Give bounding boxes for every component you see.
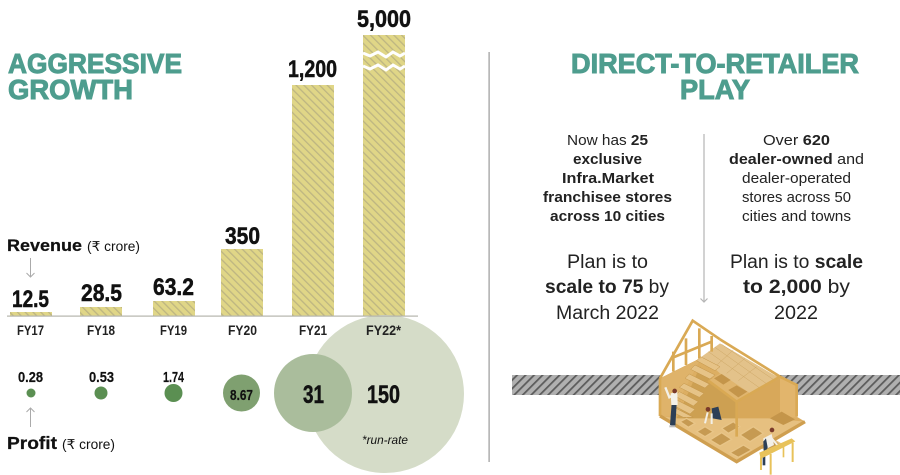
- label: revenue: (₹ crore): [87, 239, 140, 254]
- text: franchisee stores: across 10 cities: [550, 209, 665, 225]
- illustration: wooden house under construction: [660, 321, 805, 475]
- center divider: [488, 52, 490, 462]
- arrow: profit up: [26, 408, 34, 427]
- text: plan to scale to 75: Plan is to: [567, 252, 648, 273]
- text: plan to scale to 2,000: to 2,000 by: [743, 277, 851, 298]
- table: [759, 438, 795, 475]
- text: plan to scale to 75: [545, 252, 669, 324]
- profit bubbles: 0.53: [89, 369, 114, 386]
- fiscal year labels: FY19: [160, 322, 187, 338]
- text: plan to scale to 75: scale to 75 by: [545, 277, 669, 298]
- fiscal year labels: FY22*: [366, 322, 401, 338]
- bar chart: revenue: 12.5: [12, 286, 49, 313]
- panel: direct-to-retailer play: [512, 48, 900, 475]
- fiscal year labels: FY21: [299, 322, 327, 338]
- text: plan to scale to 2,000: 2022: [774, 303, 818, 324]
- fiscal year labels: FY18: [87, 322, 115, 338]
- worker: at table: [763, 428, 777, 465]
- bar chart: revenue: 28.5: [81, 280, 122, 307]
- bar chart: revenue: 1,200: [288, 56, 337, 83]
- heading: aggressive growth: [8, 48, 182, 105]
- heading: direct-to-retailer play: PLAY: [680, 74, 750, 105]
- profit bubbles: 31: [303, 381, 324, 409]
- text: dealer stores: [729, 133, 864, 225]
- profit bubbles: *run-rate: [362, 435, 408, 447]
- heading: direct-to-retailer play: DIRECT-TO-RETAILER: [571, 48, 859, 79]
- arrow: revenue down: [26, 258, 34, 277]
- bar chart: revenue: 5,000: [357, 6, 411, 33]
- worker: standing: [665, 387, 678, 427]
- text: franchisee stores: exclusive: [573, 152, 642, 168]
- text: dealer stores: stores across 50: [742, 190, 851, 206]
- fiscal year labels: FY20: [228, 322, 257, 338]
- bar chart: revenue: 63.2: [153, 274, 194, 301]
- fiscal year labels: [17, 322, 401, 338]
- text: dealer stores: cities and towns: [742, 209, 851, 225]
- text: dealer stores: Over 620: [763, 133, 830, 149]
- heading: direct-to-retailer play: [571, 48, 859, 105]
- heading: aggressive growth: GROWTH: [8, 74, 133, 105]
- fiscal year labels: FY17: [17, 322, 44, 338]
- label: profit: [7, 433, 115, 453]
- profit bubbles: 150: [367, 381, 400, 409]
- label: profit: (₹ crore): [62, 437, 115, 452]
- arrow: vertical down: [700, 134, 708, 302]
- profit bubbles: 0.28: [18, 369, 43, 386]
- label: revenue: Revenue: [7, 236, 82, 255]
- worker: kneeling: [705, 407, 722, 424]
- profit bubbles: [18, 315, 464, 473]
- text: franchisee stores: Infra.Market: [562, 171, 654, 187]
- bar chart: revenue: 350: [225, 223, 260, 250]
- bar chart: revenue: [10, 6, 411, 316]
- text: franchisee stores: Now has 25: [567, 133, 648, 149]
- panel: aggressive growth: [7, 6, 464, 473]
- hatched ground band: [512, 375, 900, 395]
- text: plan to scale to 2,000: Plan is to scale: [730, 252, 863, 273]
- text: franchisee stores: [543, 133, 672, 225]
- text: plan to scale to 75: March 2022: [556, 303, 659, 324]
- text: franchisee stores: franchisee stores: [543, 190, 672, 206]
- label: revenue: [7, 236, 140, 255]
- text: dealer stores: dealer-owned and: [729, 152, 864, 168]
- axis line: [7, 316, 418, 317]
- profit bubbles: 1.74: [163, 369, 184, 386]
- label: profit: Profit: [7, 433, 57, 453]
- text: plan to scale to 2,000: [730, 252, 863, 324]
- profit bubbles: 8.67: [230, 387, 253, 404]
- text: dealer stores: dealer-operated: [742, 171, 851, 187]
- heading: aggressive growth: AGGRESSIVE: [8, 48, 182, 79]
